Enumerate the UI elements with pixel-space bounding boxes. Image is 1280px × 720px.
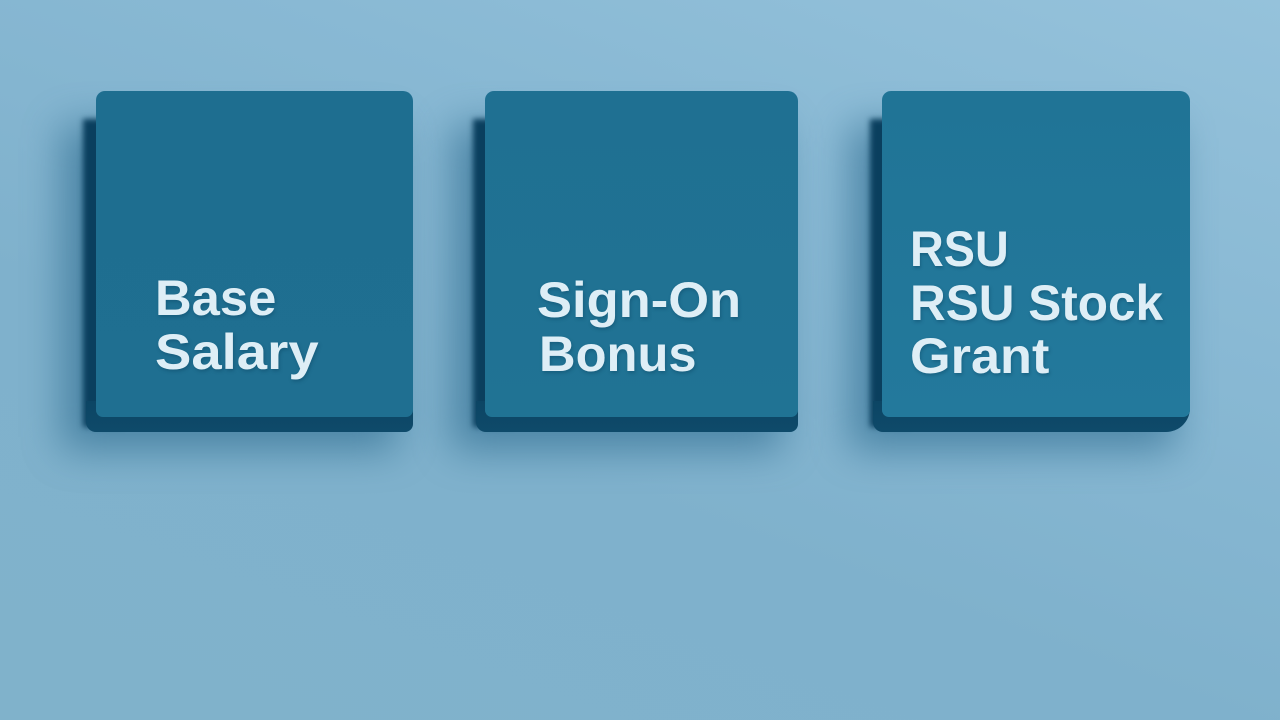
- label: sign-on bonus: [537, 272, 741, 382]
- label: sign-on bonus: Bonus: [539, 326, 697, 382]
- label: rsu stock grant: [910, 221, 1164, 384]
- label: base salary: Base: [155, 270, 276, 326]
- label: rsu stock grant: RSU Stock: [910, 274, 1163, 330]
- panel: sign-on bonus: [469, 91, 798, 432]
- panel: base salary: [79, 91, 413, 432]
- label: rsu stock grant: Grant: [910, 328, 1049, 384]
- label: rsu stock grant: RSU: [910, 221, 1009, 277]
- label: sign-on bonus: Sign-On: [537, 272, 741, 328]
- label: base salary: [155, 270, 319, 382]
- label: base salary: Salary: [155, 324, 319, 380]
- panel: rsu stock grant: [866, 91, 1190, 432]
